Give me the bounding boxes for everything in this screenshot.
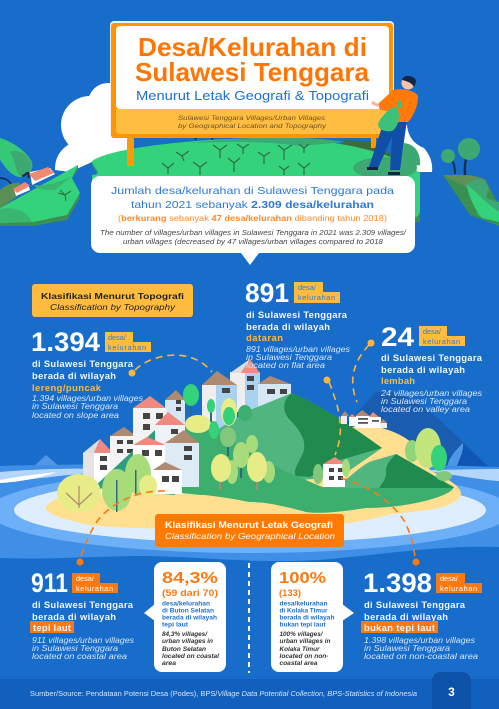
stat: 911 coastal: desa/: [76, 574, 95, 583]
summary callout: The number of villages/urban villages in Sulawesi Tenggara in 2021 was 2.309 villages/: [100, 230, 407, 237]
stat: 911 coastal: kelurahan: [76, 584, 113, 593]
stat: 891 flat: di Sulawesi Tenggara: [246, 309, 348, 320]
stat: 891 flat: in Sulawesi Tenggara: [246, 353, 333, 362]
card: Kolaka Timur: (133): [279, 588, 301, 598]
stat: 24 valley: in Sulawesi Tenggara: [381, 397, 468, 406]
stat: 911 coastal: in Sulawesi Tenggara: [32, 644, 119, 653]
english subtitle: [178, 115, 327, 130]
stat: 1.398 non coastal: in Sulawesi Tenggara: [364, 644, 451, 653]
card: Buton Selatan: urban villages in: [162, 638, 213, 645]
stat: 1.394 slope: [31, 327, 151, 420]
stat: 24 valley: di Sulawesi Tenggara: [381, 352, 483, 363]
dashed connector: coastal: [76, 491, 165, 566]
summary callout: [91, 176, 415, 265]
card: Buton Selatan: located on coastal: [162, 653, 219, 660]
topography heading: Classification by Topography: [50, 302, 176, 312]
page number: 3: [448, 685, 455, 699]
summary callout: urban villages (decreased by 47 villages/urban villages compared to 2018: [123, 239, 383, 246]
card: Buton Selatan: tepi laut: [162, 622, 189, 628]
card: Buton Selatan: area: [162, 660, 177, 667]
stat: 1.394 slope: in Sulawesi Tenggara: [32, 402, 119, 411]
dashed connector: slope: [128, 355, 212, 376]
stat: 1.398 non coastal: 1.398: [363, 568, 432, 598]
card: Kolaka Timur: 100%: [279, 570, 326, 587]
stat: 911 coastal: located on coastal area: [32, 652, 128, 661]
stat: 1.394 slope: 1.394: [31, 327, 100, 357]
front buildings: [133, 410, 387, 494]
card: Buton Selatan: 84,3% villages/: [162, 631, 208, 638]
stat: 24 valley: 24: [381, 322, 414, 352]
footer bar: [0, 679, 499, 709]
topography heading: [32, 284, 193, 317]
stat: 891 flat: desa/: [298, 283, 317, 292]
man holding bag: [367, 76, 418, 175]
stat: 1.394 slope: kelurahan: [108, 343, 146, 352]
topography heading: Klasifikasi Menurut Topografi: [41, 291, 184, 301]
stat: 1.394 slope: located on slope area: [32, 411, 120, 420]
card: Buton Selatan: desa/kelurahan: [162, 600, 210, 608]
left tree: [0, 138, 32, 208]
stat: 1.398 non coastal: di Sulawesi Tenggara: [364, 599, 466, 610]
stat: 891 flat: located on flat area: [246, 361, 326, 370]
dashed connector: flat: [324, 376, 340, 455]
card: Kolaka Timur: urban villages in: [280, 638, 331, 645]
card: Kolaka Timur: coastal area: [280, 660, 318, 667]
card: Buton Selatan: (59 dari 70): [162, 588, 218, 598]
divider: [248, 563, 250, 673]
stat: 891 flat: berada di wilayah: [246, 321, 330, 332]
stat: 911 coastal: [30, 568, 134, 661]
card: Buton Selatan: berada di wilayah: [162, 614, 217, 622]
stat: 1.398 non coastal: bukan tepi laut: [364, 622, 435, 633]
stat: 24 valley: berada di wilayah: [381, 364, 465, 375]
stat: 891 flat: kelurahan: [298, 293, 335, 302]
card: Kolaka Timur: desa/kelurahan: [280, 600, 328, 608]
stat: 24 valley: kelurahan: [423, 337, 460, 346]
trees: [57, 384, 452, 512]
stat: 891 flat: 891 villages/urban villages: [246, 345, 350, 354]
card: Kolaka Timur: Kolaka Timur: [280, 646, 320, 653]
title: Desa/Kelurahan di: [138, 32, 367, 62]
stat: 1.394 slope: 1.394 villages/urban villages: [32, 394, 143, 403]
stat: 911 coastal: 911: [31, 568, 68, 598]
stat: 24 valley: lembah: [381, 375, 415, 386]
geography heading: [155, 514, 344, 547]
clouds behind sign: [55, 83, 432, 172]
stat: 1.398 non coastal: 1.398 villages/urban villages: [364, 636, 475, 645]
stat: 1.394 slope: di Sulawesi Tenggara: [32, 358, 134, 369]
stat: 911 coastal: tepi laut: [33, 622, 71, 633]
dashed connector: non coastal: [341, 478, 420, 566]
stat: 911 coastal: di Sulawesi Tenggara: [32, 599, 134, 610]
stat: 24 valley: desa/: [423, 327, 442, 336]
card: Kolaka Timur: bukan tepi laut: [280, 622, 326, 628]
stat: 891 flat: [245, 278, 350, 370]
rear buildings: [83, 359, 291, 493]
card: Kolaka Timur: located on non-: [280, 653, 328, 660]
stat: 911 coastal: berada di wilayah: [32, 611, 116, 622]
title: Sulawesi Tenggara: [135, 57, 370, 87]
stat: 1.398 non coastal: desa/: [440, 574, 459, 583]
summary callout: Jumlah desa/kelurahan di Sulawesi Tenggara pada: [111, 185, 394, 197]
stat: 1.394 slope: lereng/puncak: [32, 382, 102, 393]
left hill with houses: [0, 165, 80, 226]
card: Buton Selatan: 84,3%: [162, 570, 218, 587]
summary callout: (berkurang sebanyak 47 desa/kelurahan dibanding tahun 2018): [118, 213, 387, 223]
card: Kolaka Timur: di Kolaka Timur: [280, 608, 328, 614]
card: Buton Selatan: [144, 562, 226, 672]
stat: 24 valley: [380, 322, 483, 414]
stat: 1.394 slope: berada di wilayah: [32, 370, 116, 381]
stat: 1.398 non coastal: kelurahan: [440, 584, 477, 593]
stat: 891 flat: dataran: [246, 332, 283, 343]
stat: 1.398 non coastal: berada di wilayah: [364, 611, 448, 622]
geography heading: Classification by Geographical Location: [165, 531, 335, 541]
page number: [432, 672, 471, 709]
card: Kolaka Timur: 100% villages/: [280, 631, 324, 638]
subtitle: Menurut Letak Geografi & Topografi: [136, 88, 369, 103]
card: Buton Selatan: Buton Selatan: [162, 646, 206, 653]
card: Buton Selatan: di Buton Selatan: [162, 608, 214, 614]
hills: [93, 393, 454, 513]
card: Kolaka Timur: berada di wilayah: [280, 614, 335, 622]
stat: 1.394 slope: desa/: [108, 333, 127, 342]
dashed connector: valley: [353, 340, 374, 402]
title: [135, 32, 370, 87]
stat: 911 coastal: 911 villages/urban villages: [32, 636, 134, 645]
stat: 24 valley: located on valley area: [381, 405, 471, 414]
title sign: [110, 21, 394, 166]
card: Kolaka Timur: [271, 562, 354, 672]
stat: 24 valley: 24 villages/urban villages: [380, 389, 482, 398]
english subtitle: by Geographical Location and Topography: [178, 123, 327, 130]
stat: 891 flat: 891: [245, 278, 289, 308]
stat: 1.398 non coastal: located on non-coastal area: [364, 652, 479, 661]
right hill with trees: [441, 138, 499, 226]
sea and sand background: [0, 391, 499, 561]
source text: Sumber/Source: Pendataan Potensi Desa (Podes), BPS/ Village Data Potential Collection, BPS-Statistics of Indonesia: [30, 689, 417, 698]
farm hill with seedlings: [92, 136, 420, 222]
stat: 1.398 non coastal: [361, 568, 482, 661]
summary callout: tahun 2021 sebanyak 2.309 desa/kelurahan: [131, 199, 374, 211]
geography heading: Klasifikasi Menurut Letak Geografi: [165, 520, 333, 530]
english subtitle: Sulawesi Tenggara Villages/Urban Villages: [178, 115, 326, 122]
